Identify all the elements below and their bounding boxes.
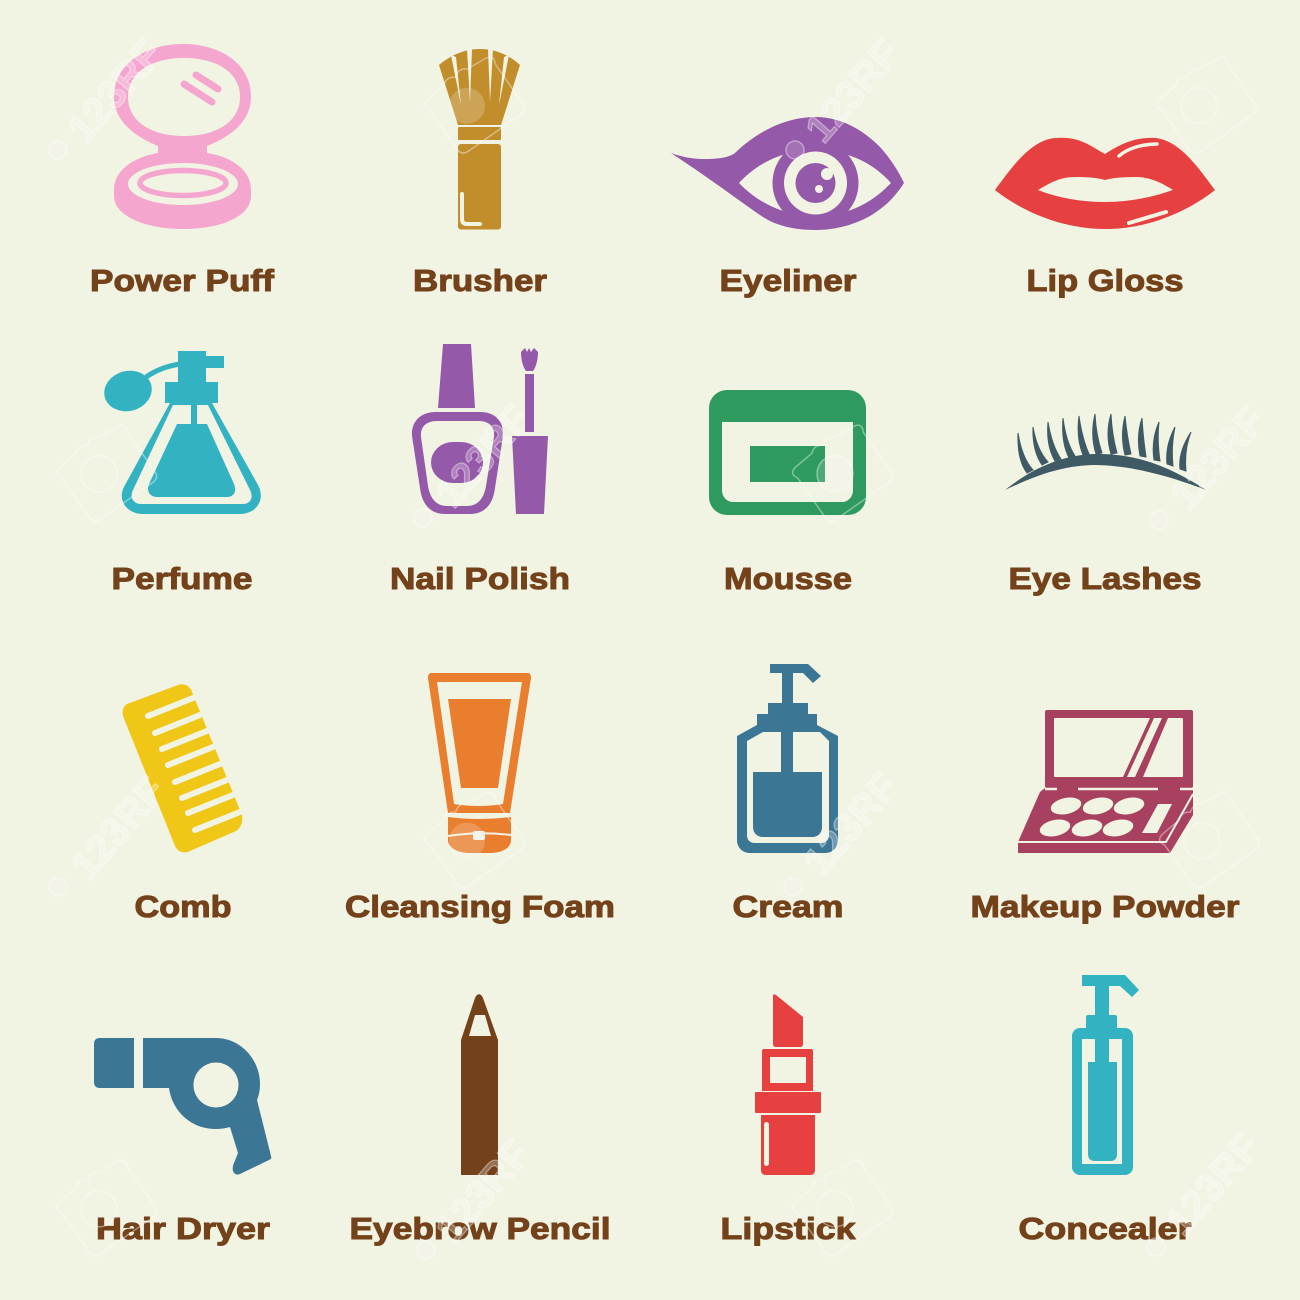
icon: power puff: [114, 44, 251, 229]
icon: mousse: [709, 390, 866, 515]
label: Comb: Comb: [134, 889, 232, 924]
label: Eye Lashes: Eye Lashes: [1008, 561, 1202, 596]
label: Hair Dryer: Hair Dryer: [96, 1211, 270, 1246]
watermark stamps and logotype: 123RF: [795, 765, 907, 884]
icon: eyeliner: [671, 117, 904, 230]
icon: makeup powder: [1018, 710, 1193, 853]
watermark stamps and logotype: 123RF: [797, 32, 909, 151]
icon: cleansing foam: [428, 673, 531, 853]
label: Cleansing Foam: Cleansing Foam: [345, 889, 615, 924]
icon: eyebrow pencil: [461, 994, 498, 1175]
label: Lip Gloss: Lip Gloss: [1026, 263, 1184, 298]
label: Lipstick: Lipstick: [720, 1211, 856, 1246]
label: Eyeliner: Eyeliner: [720, 263, 856, 298]
icon: concealer: [1072, 975, 1139, 1175]
label: Perfume: Perfume: [112, 561, 252, 596]
icon: eye lashes: [1005, 414, 1206, 490]
label: Nail Polish: Nail Polish: [390, 561, 570, 596]
label: Cream: Cream: [732, 889, 844, 924]
label: Power Puff: Power Puff: [90, 263, 275, 298]
icon: cream: [737, 664, 838, 853]
icon: perfume: [100, 351, 261, 514]
watermark stamps and logotype: 123RF: [59, 32, 171, 151]
watermark stamps and logotype: 123RF: [1157, 1125, 1269, 1244]
label: Eyebrow Pencil: Eyebrow Pencil: [350, 1211, 610, 1246]
icon: lipstick: [755, 994, 821, 1175]
icon: lip gloss: [995, 138, 1215, 229]
watermark stamps and logotype: 123RF: [1162, 399, 1274, 518]
icon: comb: [123, 684, 245, 852]
icon: nail polish: [412, 344, 548, 514]
label: Brusher: Brusher: [413, 263, 547, 298]
watermark stamps and logotype: 123RF: [427, 397, 539, 516]
icon: hair dryer: [94, 1038, 271, 1175]
icon: brusher: [439, 49, 520, 230]
label: Makeup Powder: Makeup Powder: [970, 889, 1240, 924]
label: Mousse: Mousse: [724, 561, 852, 596]
watermark stamps and logotype: 123RF: [62, 769, 174, 888]
label: Concealer: Concealer: [1018, 1211, 1192, 1246]
watermark stamps and logotype: 123RF: [427, 1132, 539, 1251]
